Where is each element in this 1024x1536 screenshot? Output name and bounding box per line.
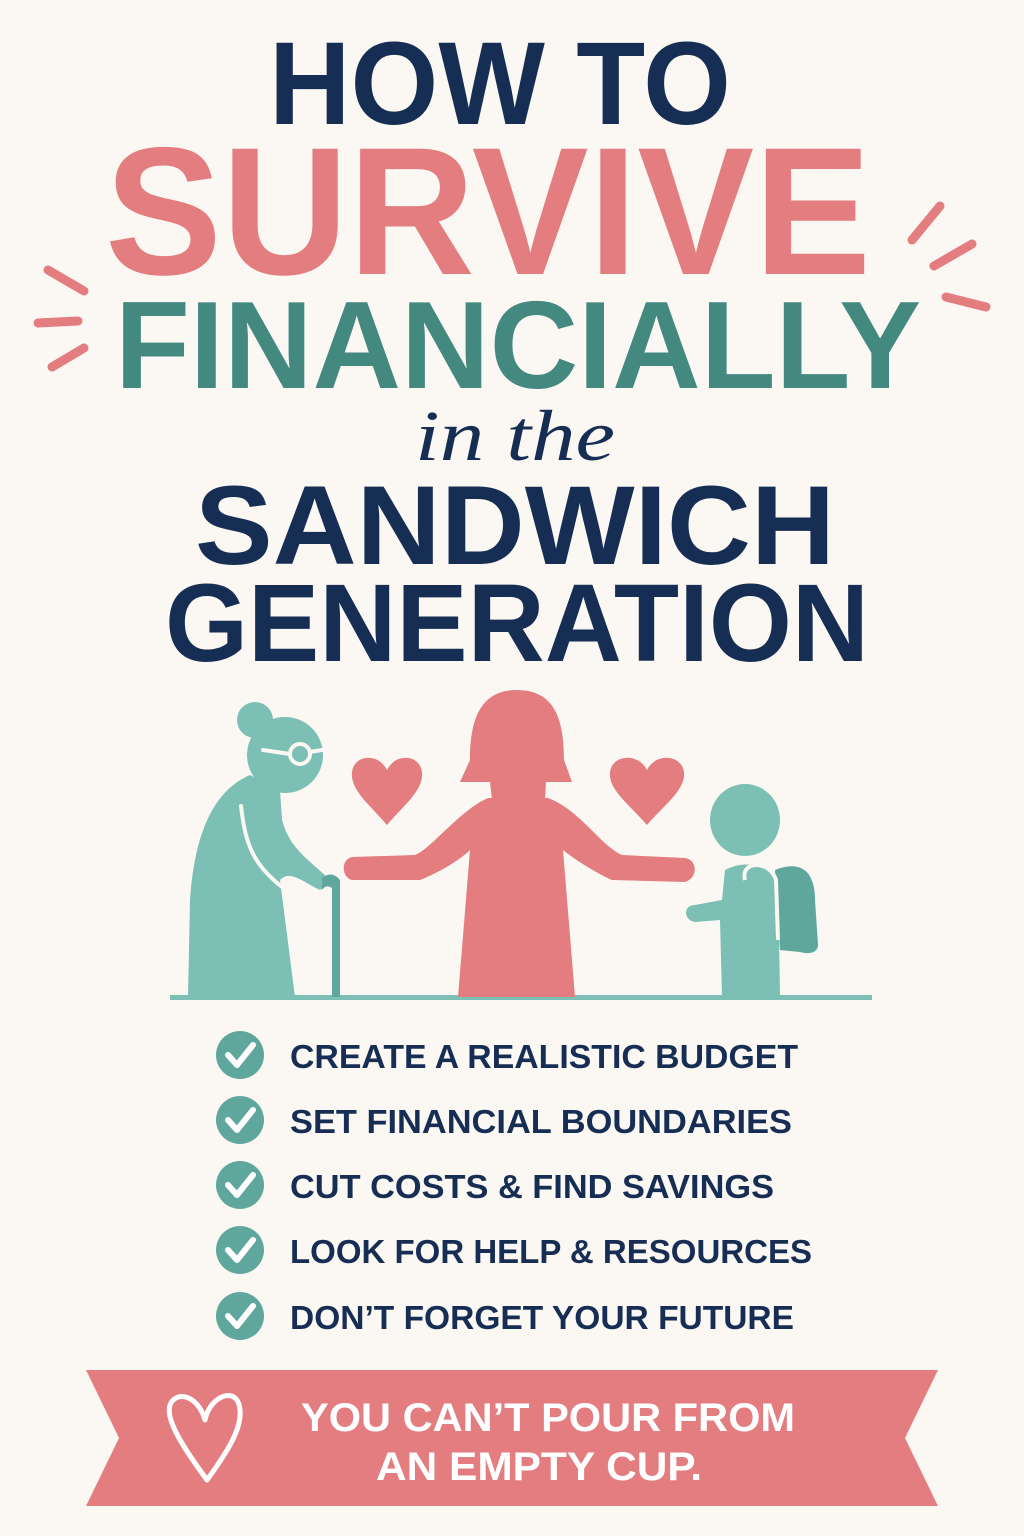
title: how to: HOW TO (269, 18, 731, 150)
banner text: AN EMPTY CUP. (376, 1445, 702, 1489)
title: financially: FINANCIALLY (115, 277, 921, 415)
checklist (216, 1031, 812, 1340)
icon: heart outline (169, 1396, 240, 1480)
title: generation: GENERATION (165, 562, 869, 685)
title block (105, 18, 921, 685)
item 3 (216, 1161, 774, 1209)
item 5 (216, 1292, 794, 1340)
banner (86, 1370, 938, 1506)
title: sandwich: SANDWICH (195, 463, 835, 588)
item 2: SET FINANCIAL BOUNDARIES (290, 1103, 792, 1140)
decorative rays right (912, 206, 986, 307)
banner text (301, 1396, 795, 1489)
title: in the: in the (415, 396, 615, 476)
child (686, 784, 818, 997)
item 1: CREATE A REALISTIC BUDGET (290, 1038, 798, 1075)
decorative rays left (38, 270, 84, 367)
item 1 (216, 1031, 798, 1079)
mother (344, 690, 695, 997)
item 3: CUT COSTS & FIND SAVINGS (290, 1168, 774, 1205)
ground line (170, 995, 872, 1000)
item 5: DON’T FORGET YOUR FUTURE (290, 1299, 794, 1336)
grandmother glasses & arm line (241, 744, 322, 900)
banner text: YOU CAN’T POUR FROM (301, 1396, 795, 1440)
heart left (352, 758, 422, 825)
heart right (610, 758, 684, 825)
title: survive: SURVIVE (105, 109, 871, 313)
item 4 (216, 1226, 812, 1274)
grandmother (188, 702, 340, 997)
item 2 (216, 1096, 792, 1144)
illustration: family (170, 690, 872, 1000)
item 4: LOOK FOR HELP & RESOURCES (290, 1233, 812, 1270)
